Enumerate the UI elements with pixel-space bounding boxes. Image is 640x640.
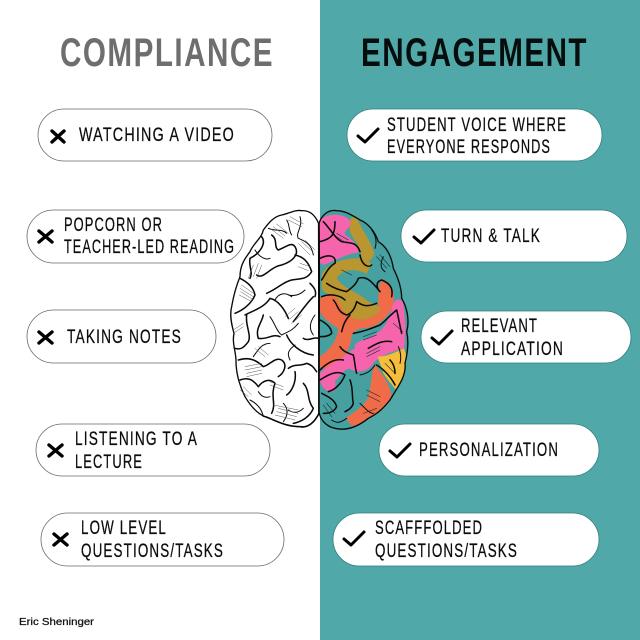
pill: scaffolded questions/tasks: [333, 513, 599, 566]
color patch: mustard strip: [349, 216, 374, 261]
color patch: orange middle: [318, 281, 394, 369]
pill: listening to a lecture: LISTENING TO A: [75, 429, 198, 450]
pill: personalization: [379, 424, 599, 476]
color patch: orange bottom: [346, 365, 392, 426]
color patch: yellow: [378, 348, 406, 390]
pill: scaffolded questions/tasks: SCAFFFOLDED: [375, 518, 483, 539]
brain: left hemisphere: [231, 210, 319, 427]
pill: student voice: STUDENT VOICE WHERE: [387, 115, 567, 136]
pill: scaffolded questions/tasks: QUESTIONS/TASKS: [375, 541, 518, 562]
pill: personalization: PERSONALIZATION: [419, 440, 559, 461]
pill: low level questions/tasks: LOW LEVEL: [81, 518, 167, 539]
pill: turn and talk: [401, 210, 627, 262]
pill: relevant application: [421, 311, 631, 363]
pill: popcorn or teacher-led reading: TEACHER-LED READING: [64, 237, 235, 258]
icon: brain: [231, 210, 408, 429]
pill: taking notes: TAKING NOTES: [67, 327, 182, 348]
pill: watching a video: WATCHING A VIDEO: [79, 125, 235, 146]
pill: relevant application: APPLICATION: [461, 339, 564, 360]
pill: listening to a lecture: LECTURE: [75, 452, 143, 473]
brain: right hemisphere colored: [318, 210, 408, 429]
color patch: pink lower: [320, 299, 405, 392]
pill: watching a video: [38, 109, 272, 161]
color patch: mustard: [322, 258, 381, 319]
pill: low level questions/tasks: QUESTIONS/TASKS: [81, 541, 224, 562]
footer credit: Eric Sheninger: [19, 617, 95, 628]
pill: listening to a lecture: [36, 424, 270, 476]
color patch: pink top: [318, 215, 358, 265]
pill: low level questions/tasks: [41, 513, 284, 566]
pill: popcorn or teacher-led reading: [27, 210, 244, 263]
pill: popcorn or teacher-led reading: POPCORN OR: [64, 215, 163, 236]
pill: student voice: [347, 109, 602, 161]
pill: relevant application: RELEVANT: [461, 316, 538, 337]
pill: taking notes: [27, 310, 216, 363]
pill: turn and talk: TURN & TALK: [441, 226, 541, 247]
pill: student voice: EVERYONE RESPONDS: [387, 137, 551, 158]
panel: engagement background: [320, 0, 640, 640]
title: compliance: COMPLIANCE: [60, 31, 274, 75]
